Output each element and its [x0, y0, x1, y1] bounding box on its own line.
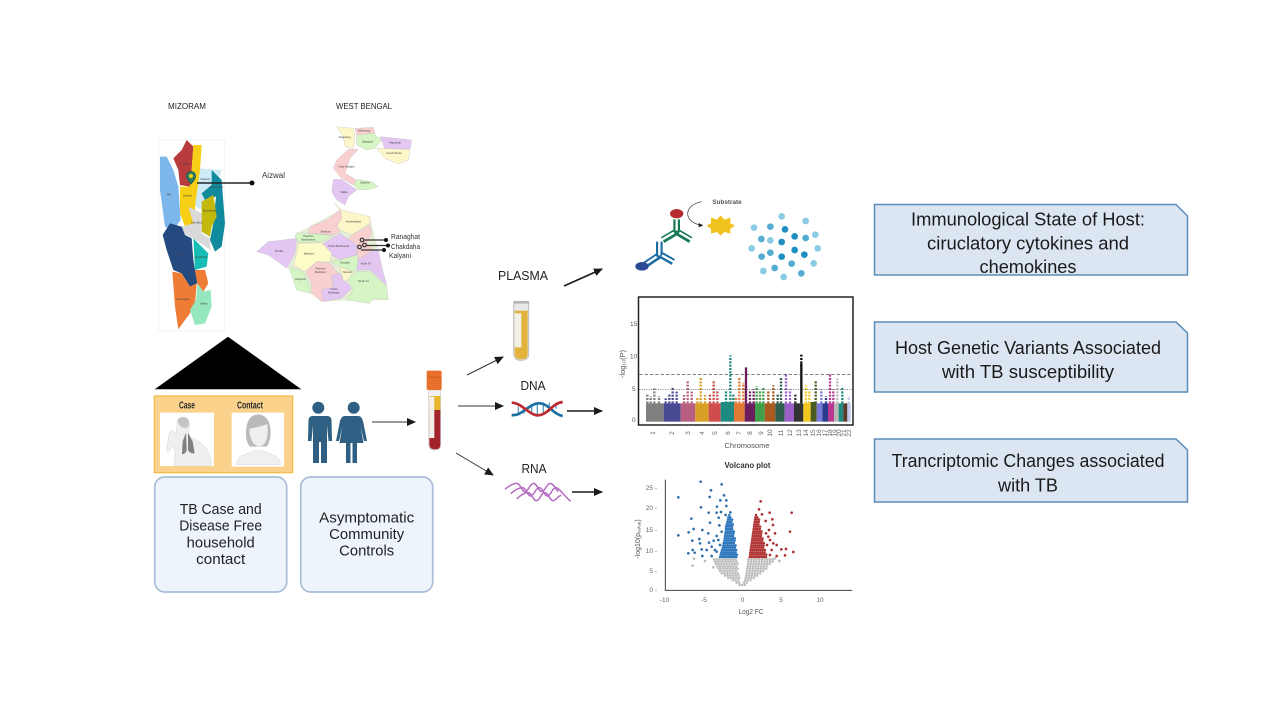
volcano axis ticks	[646, 485, 824, 604]
y axis labels: 5	[632, 386, 636, 393]
chromosome labels: 8	[747, 431, 754, 435]
chromosome labels: 17	[822, 429, 829, 437]
volcano axis ticks: 0	[741, 597, 745, 604]
Mizoram districts: Hnahthial	[194, 255, 207, 259]
label: RNA: RNA	[522, 461, 547, 476]
sampling site callouts: Kalyani	[389, 253, 411, 260]
icon: man	[308, 402, 332, 463]
Mizoram districts: Kolasib	[179, 161, 190, 165]
chromosome labels: 20	[836, 429, 843, 437]
West Bengal districts: South 24	[358, 279, 369, 283]
West Bengal districts: Darjeeling	[339, 135, 351, 139]
panel: asymptomatic community controls: Controls	[339, 544, 394, 560]
volcano axis ticks: 10 -	[646, 548, 657, 555]
West Bengal districts: Alipurduar	[389, 141, 401, 145]
pin and Aizwal callout	[186, 171, 285, 186]
panel: asymptomatic community controls: Community	[329, 527, 405, 543]
callout: immunological state	[874, 204, 1188, 277]
illustration: case with lungs	[160, 413, 214, 466]
chromosome labels: 13	[796, 429, 803, 437]
West Bengal districts: Dakshin	[360, 180, 370, 184]
arrow: blood to RNA	[456, 453, 493, 475]
West Bengal districts: Birbhum	[321, 229, 331, 233]
icon: antibody immunoassay	[635, 200, 821, 280]
West Bengal districts: Malda	[340, 190, 348, 194]
Mizoram districts: Aizawl	[183, 193, 192, 197]
callout: transcriptomic changes: with TB	[997, 476, 1058, 496]
map title: West Bengal: WEST BENGAL	[336, 102, 393, 111]
y axis labels	[618, 321, 638, 424]
illustration: contact portrait	[232, 413, 284, 467]
Mizoram districts: Champhai	[210, 185, 223, 189]
West Bengal districts: Paschim	[303, 234, 314, 238]
callout: immunological state: chemokines	[980, 257, 1076, 277]
chromosome labels: 7	[736, 431, 743, 435]
chromosome labels	[650, 429, 853, 437]
panel: TB case and household contact: Disease Free	[179, 519, 262, 535]
arrow: blood to DNA	[458, 405, 503, 407]
sampling site callouts	[358, 234, 420, 260]
chromosome labels: 1	[650, 431, 657, 435]
arrow: people to blood tube	[372, 421, 415, 423]
Mizoram districts: Sherchhip	[203, 209, 216, 213]
arrow: DNA to Manhattan plot	[567, 410, 602, 412]
West Bengal districts: Medinipur	[328, 291, 340, 295]
West Bengal districts: Paschim	[316, 266, 327, 270]
West Bengal districts: Howrah	[343, 270, 352, 274]
West Bengal districts: Bardhaman	[301, 238, 316, 242]
label: Substrate: Substrate	[712, 200, 742, 206]
antibody	[635, 202, 703, 271]
chromosome labels: 4	[699, 431, 706, 435]
Mizoram districts: Mit	[167, 192, 171, 196]
West Bengal districts: Jalpaiguri	[362, 139, 373, 143]
panel: case and contact household	[154, 396, 293, 473]
y axis labels: 10	[630, 354, 638, 360]
chart: Manhattan plot	[618, 297, 853, 450]
volcano axis ticks: -5	[701, 597, 707, 604]
volcano x axis title: Log2 FC	[738, 609, 764, 616]
icon: blood tube	[427, 371, 442, 450]
map title: Mizoram: MIZORAM	[168, 102, 206, 111]
sampling site callouts: Chakdaha	[391, 244, 420, 251]
icon: DNA helix	[512, 402, 563, 416]
volcano axis ticks: 20 -	[646, 505, 657, 512]
icon: cytokine dots	[748, 213, 821, 280]
map: Mizoram	[158, 102, 285, 331]
Mizoram districts	[158, 140, 225, 331]
Mizoram districts: Serchhip	[191, 220, 203, 224]
West Bengal districts: Kalimpong	[358, 128, 371, 132]
callout: transcriptomic changes	[874, 439, 1188, 502]
callout: transcriptomic changes: Trancriptomic Changes associated	[892, 451, 1164, 471]
chromosome labels: 19	[832, 429, 839, 437]
label: PLASMA: PLASMA	[498, 268, 548, 283]
axes	[665, 480, 852, 590]
y axis labels: 0	[632, 417, 636, 424]
chromosome labels: 6	[725, 431, 732, 435]
volcano axis ticks: 25 -	[646, 485, 657, 492]
callout: host genetic variants	[874, 322, 1188, 392]
panel: asymptomatic community controls	[301, 477, 433, 592]
icon: woman	[336, 402, 367, 463]
panel: TB case and household contact: contact	[196, 552, 245, 568]
callout: host genetic variants: Host Genetic Variants Associated	[895, 338, 1161, 358]
sampling site callouts: Ranaghat	[391, 234, 420, 241]
volcano axis ticks: 5 -	[649, 568, 657, 575]
chromosome labels: 11	[778, 429, 785, 436]
West Bengal districts: Hooghly	[340, 260, 351, 264]
chromosome labels: 14	[803, 429, 810, 437]
chromosome labels: 5	[712, 431, 719, 435]
West Bengal districts: Medinipur	[315, 270, 327, 274]
chromosome labels: 9	[758, 431, 765, 435]
panel: TB case and household contact: household	[187, 535, 255, 551]
household roof	[155, 337, 301, 389]
arrow: plasma to immunoassay	[564, 269, 602, 286]
panel: asymptomatic community controls: Asymptomatic	[319, 510, 414, 526]
West Bengal districts	[257, 127, 412, 303]
chromosome labels: 12	[787, 429, 794, 437]
arrow: blood to plasma	[467, 357, 503, 375]
plot frame	[638, 297, 853, 425]
volcano axis ticks: 5	[779, 597, 783, 604]
volcano axis ticks: 15 -	[646, 527, 657, 534]
icon: substrate star	[706, 215, 735, 236]
chromosome labels: 2	[669, 431, 676, 435]
chromosome labels: 3	[685, 431, 692, 435]
panel: TB case and household contact	[155, 477, 287, 592]
chromosome labels: 10	[767, 429, 774, 437]
Mizoram districts: Saiha	[200, 302, 208, 306]
map: West Bengal	[257, 102, 420, 303]
label: Case: Case	[179, 401, 195, 412]
West Bengal districts: Cooch Behar	[386, 151, 402, 155]
icon: community controls people	[308, 402, 367, 463]
volcano axis ticks: -10	[660, 597, 670, 604]
West Bengal districts: North 24	[361, 262, 371, 266]
chromosome labels: 15	[810, 429, 817, 437]
West Bengal districts: Murshidabad	[346, 219, 362, 223]
callout: host genetic variants: with TB susceptibility	[941, 362, 1114, 382]
icon: plasma tube	[513, 301, 529, 360]
callout: immunological state: ciruclatory cytokines and	[927, 234, 1129, 254]
West Bengal districts: Uttar Dinajpur	[338, 164, 355, 168]
volcano points	[665, 480, 852, 590]
panel: TB case and household contact: TB Case and	[180, 502, 262, 518]
icon: RNA strands	[505, 483, 571, 501]
chromosome labels: 21	[841, 429, 848, 437]
chromosome labels: 16	[816, 429, 823, 437]
chromosome bars and association points	[639, 353, 853, 422]
volcano axis ticks: 0 -	[649, 587, 657, 594]
x axis title: Chromosome	[724, 441, 770, 450]
label: DNA: DNA	[520, 378, 546, 393]
volcano axis ticks: 10	[816, 597, 824, 604]
West Bengal districts: Purulia	[275, 249, 284, 253]
West Bengal districts: Bankura	[304, 251, 314, 255]
volcano y axis title: -log10(pᵥₐₗᵤₑ)	[635, 519, 642, 559]
Mizoram districts: Lawngtlai	[176, 297, 189, 301]
chromosome labels: 18	[827, 429, 834, 437]
West Bengal districts: Jhargram	[295, 277, 307, 281]
label: Contact: Contact	[237, 400, 264, 411]
chromosome labels: 22	[846, 429, 853, 437]
Mizoram districts: Saitual	[200, 177, 210, 181]
Mizoram districts: Lunglei	[175, 252, 185, 256]
pin and Aizwal callout: Aizwal	[262, 171, 285, 180]
West Bengal districts: Purba	[330, 287, 338, 291]
chart: volcano plot	[635, 461, 852, 616]
arrow: RNA to volcano plot	[572, 491, 602, 493]
West Bengal districts: Purba Bardhaman	[328, 244, 350, 248]
y axis labels: -log₁₀(P)	[618, 349, 627, 378]
y axis labels: 15	[630, 321, 638, 328]
callout: immunological state: Immunological State of Host:	[911, 210, 1145, 230]
volcano title: Volcano plot	[724, 461, 771, 470]
